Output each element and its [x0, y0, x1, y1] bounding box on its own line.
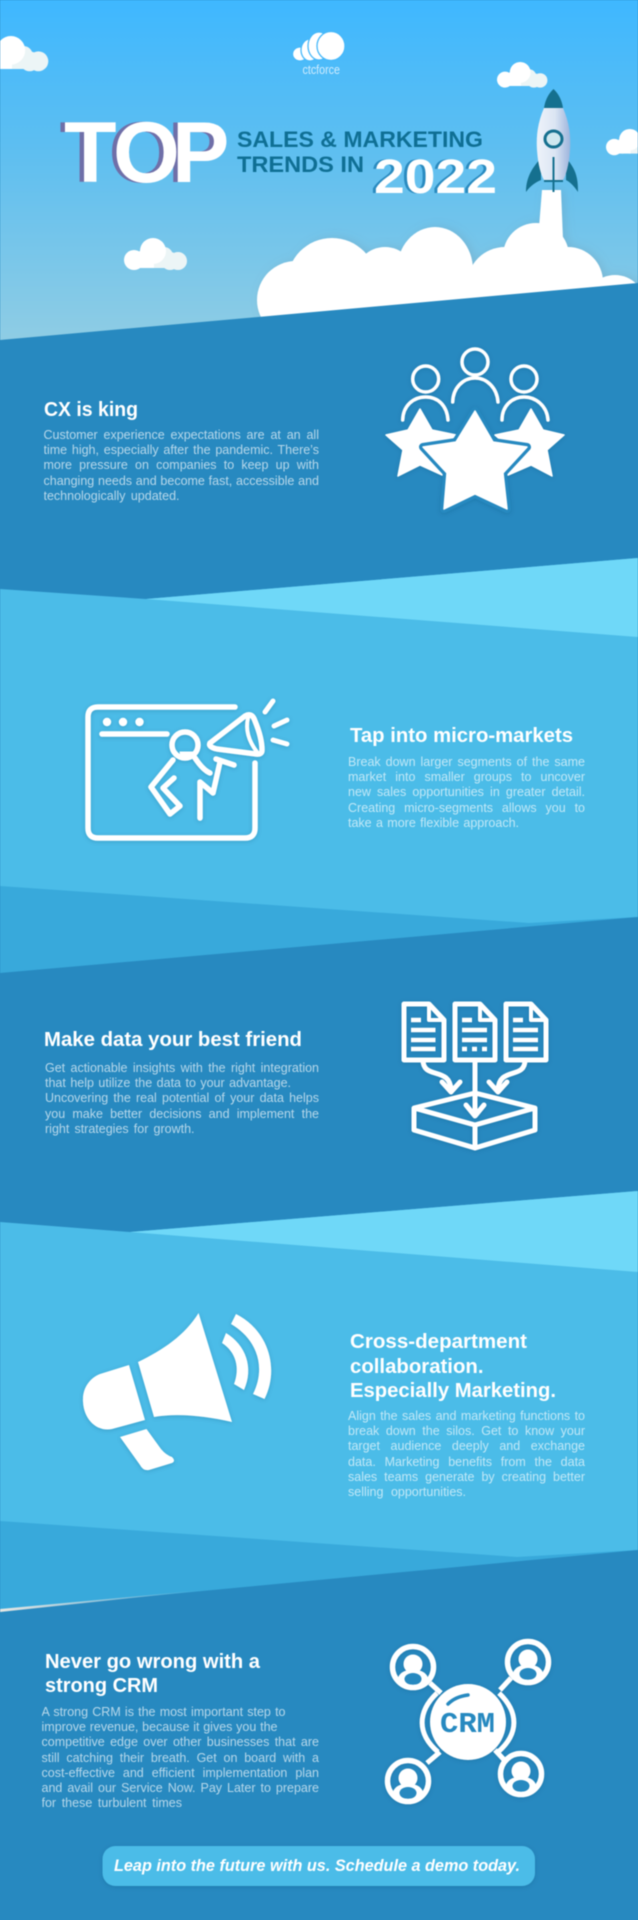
- body text: A strong CRM is the most important step to: [42, 1705, 286, 1719]
- body text: time high, especially after the pandemic. There’s: [44, 443, 319, 457]
- hero header: [0, 0, 638, 345]
- title: sales and marketing trends in: [237, 127, 483, 177]
- body text: right strategies for growth.: [45, 1122, 194, 1136]
- cloud: mid right: [606, 129, 638, 155]
- call to action button: [102, 1846, 535, 1886]
- body text: for these turbulent times: [42, 1796, 182, 1810]
- call to action button: Leap into the future with us. Schedule a demo today.: [114, 1857, 520, 1875]
- heading: Never go wrong with a: [45, 1651, 261, 1673]
- heading: Make data your best friend: [44, 1029, 302, 1051]
- body text: break down the silos. Get to know your: [348, 1424, 585, 1438]
- body text: market into smaller groups to uncover: [348, 770, 585, 784]
- heading: Tap into micro-markets: [350, 725, 573, 747]
- icon: presenter with megaphone in browser window: [88, 701, 287, 838]
- logo: ctcforce: [302, 63, 340, 77]
- panel: cross-department collaboration: [0, 1180, 638, 1620]
- cloud: mid left: [124, 238, 187, 270]
- body text: Get actionable insights with the right integration: [45, 1061, 319, 1075]
- icon: megaphone with sound waves: [83, 1313, 271, 1470]
- icon: crm network: [388, 1642, 548, 1802]
- body text: Uncovering the real potential of your data helps: [45, 1091, 319, 1105]
- body text: and avail our Service Now. Pay Later to prepare: [42, 1781, 319, 1795]
- title: 2022: 2022: [371, 151, 494, 204]
- body text: cost-effective and efficient implementation plan: [42, 1766, 319, 1780]
- body text: Align the sales and marketing functions to: [348, 1409, 585, 1423]
- panel: cx is king: [0, 283, 638, 637]
- body text: data. Marketing benefits from the data: [348, 1455, 585, 1469]
- heading: CX is king: [44, 399, 138, 421]
- body text: [348, 1409, 585, 1504]
- body text: [45, 1061, 319, 1141]
- icon: people and stars: [386, 349, 564, 509]
- body text: Customer experience expectations are at an all: [44, 428, 319, 442]
- body text: take a more flexible approach.: [348, 816, 519, 830]
- title: TOP: TOP: [60, 105, 225, 201]
- panel: tap into micro-markets: [0, 540, 638, 1000]
- body text: [42, 1705, 319, 1815]
- big cloud rocket exhaust: [257, 190, 638, 345]
- heading: collaboration.: [350, 1356, 484, 1378]
- body text: more pressure on companies to keep up with: [44, 458, 319, 472]
- body text: you make better decisions and implement the: [45, 1107, 319, 1121]
- heading: strong CRM: [45, 1675, 158, 1697]
- heading: [45, 1651, 261, 1697]
- heading: Especially Marketing.: [350, 1380, 556, 1402]
- icon: documents flowing into box: [404, 1004, 546, 1148]
- body text: [348, 755, 585, 835]
- body text: changing needs and become fast, accessible and: [44, 474, 319, 488]
- icon: crm network: CRM: [440, 1708, 495, 1741]
- heading: Cross-department: [350, 1331, 527, 1353]
- title: TOP: TOP: [64, 105, 229, 201]
- body text: Creating micro-segments allows you to: [348, 801, 585, 815]
- panel: make data your best friend: [0, 917, 638, 1272]
- title: sales and marketing trends in: SALES & MARKETING: [237, 127, 483, 152]
- body text: target audience deeply and exchange: [348, 1439, 585, 1453]
- body text: new sales opportunities in greater detail.: [348, 785, 585, 799]
- panel: strong crm: [0, 1550, 638, 1920]
- body text: selling opportunities.: [348, 1485, 466, 1499]
- icon: rocket: [526, 89, 578, 192]
- body text: still catching their breath. Get on board with a: [42, 1751, 319, 1765]
- body text: that help utilize the data to your advantage.: [45, 1076, 291, 1090]
- body text: competitive edge over other businesses that are: [42, 1735, 319, 1749]
- cloud: top left: [0, 36, 48, 71]
- title: 2022: 2022: [374, 151, 497, 204]
- title: sales and marketing trends in: TRENDS IN: [237, 152, 364, 177]
- cloud: top right: [497, 62, 547, 88]
- body text: sales teams generate by creating better: [348, 1470, 585, 1484]
- body text: [44, 428, 319, 508]
- body text: technologically updated.: [44, 489, 180, 503]
- heading: [350, 1331, 556, 1402]
- body text: Break down larger segments of the same: [348, 755, 585, 769]
- logo: [292, 32, 345, 77]
- body text: improve revenue, because it gives you the: [42, 1720, 278, 1734]
